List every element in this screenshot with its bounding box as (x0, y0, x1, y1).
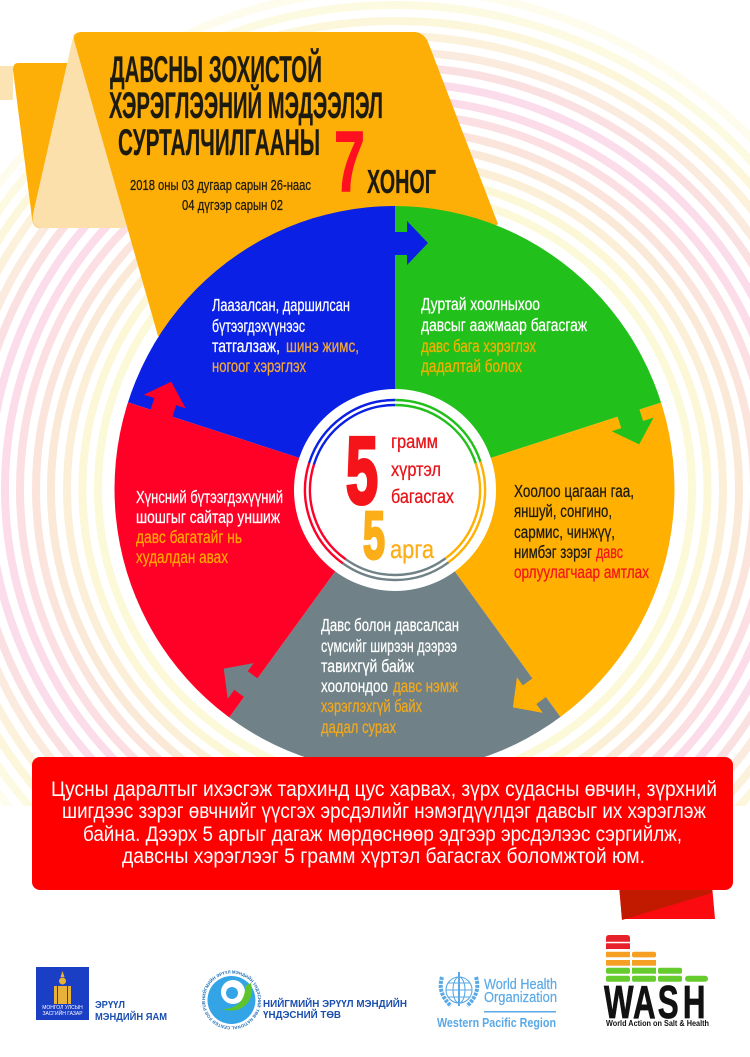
blue emblem square (36, 967, 89, 1020)
text: red wedge (136, 487, 283, 567)
WASH tagline: World Action on Salt & Health (606, 1018, 709, 1028)
text: gray wedge: сүмсийг ширээн дээрээ (321, 636, 457, 656)
method label: арга (390, 534, 434, 564)
ribbon back panel (13, 63, 70, 228)
word: week: ХОНОГ (367, 163, 436, 200)
message text: давсны хэрэглээг 5 грамм хүртэл багасгах боломжтой юм. (122, 845, 645, 868)
message text (51, 778, 717, 868)
blue disc (208, 976, 256, 1024)
arrow: gray into red (211, 651, 265, 707)
WHO globe (441, 972, 477, 1006)
text: gray wedge: хэрэглэхгүй байх (321, 696, 422, 716)
red message box (32, 757, 733, 920)
logo: National Center for Public Health: ҮНДЭСНИЙ ТӨВ (263, 1008, 341, 1021)
text: red wedge: худалдан авах (136, 547, 228, 567)
text: green wedge: давс бага хэрэглэх (421, 336, 536, 356)
text: orange wedge (514, 481, 649, 582)
logo: Ministry of Health: МЭНДИЙН ЯАМ (95, 1010, 167, 1023)
background concentric rings (0, 0, 750, 806)
text: blue wedge: шинэ жимс, (286, 336, 359, 356)
text: gray wedge: хоолондоо (321, 676, 388, 696)
title ribbon (0, 32, 498, 336)
ribbon fold under box (619, 885, 712, 920)
wheel wedges (114, 206, 674, 757)
text: orange wedge: давс (596, 542, 623, 562)
wedge: blue (128, 206, 395, 458)
message text: байна. Дээрх 5 аргыг дагаж мөрдөснөөр эдгээр эрсдэлээс сэргийлж, (83, 823, 682, 846)
text: blue wedge: Лаазалсан, даршилсан (212, 295, 350, 315)
logo: Ministry of Health (36, 967, 167, 1023)
WHO region: Western Pacific Region (437, 1016, 556, 1030)
ribbon strip (619, 885, 715, 919)
center badge: хүртэл (391, 460, 441, 481)
arrow: red into blue (139, 375, 192, 422)
text: gray wedge: тавихгүй байж (321, 656, 414, 676)
logo: Ministry of Health: ЗАСГИЙН ГАЗАР (42, 1009, 83, 1017)
wedge: gray (229, 571, 560, 757)
circular caption (205, 974, 258, 1026)
text: orange wedge: Хоолоо цагаан гаа, (514, 481, 634, 501)
wedge: orange (454, 402, 674, 717)
text: orange wedge: орлуулагчаар амтлах (514, 562, 649, 582)
date range: 2018 оны 03 дугаар сарын 26-наас (130, 177, 311, 194)
text: blue wedge: бүтээгдэхүүнээс (212, 316, 305, 336)
level bars (606, 935, 708, 982)
wedge: green (395, 206, 661, 458)
text: red wedge: Хүнсний бүтээгдэхүүний (136, 487, 283, 507)
wedge: red (114, 402, 336, 718)
text: red wedge: давс багатайг нь (136, 527, 242, 547)
text: gray wedge: Давс болон давсалсан (321, 615, 459, 635)
title text: ХЭРЭГЛЭЭНИЙ МЭДЭЭЛЭЛ (109, 84, 383, 126)
white swirl (221, 980, 245, 1004)
white disc (294, 389, 496, 591)
logo: National Center for Public Health (202, 970, 407, 1030)
ribbon tail left edge (0, 66, 13, 100)
logo: National Center for Public Health: НИЙГМИЙН ЭРҮҮЛ МЭНДИЙН ҮНДЭСНИЙ ТӨВ NATIONAL CENTER FOR PUBLIC HEALTH (202, 970, 262, 1030)
center badge: багасгах (391, 487, 454, 508)
ministry name: ЭРҮҮЛ (95, 1000, 125, 1011)
ribbon main panel (74, 32, 498, 336)
WHO name: World Health (484, 976, 557, 993)
box body (32, 757, 733, 890)
text: orange wedge: нимбэг зэрэг (514, 542, 592, 562)
ribbon fold (33, 33, 126, 228)
text: gray wedge: дадал сурах (321, 717, 396, 737)
soyombo emblem (54, 971, 71, 1004)
text: blue wedge: татгалзаж, (212, 336, 280, 356)
logo: WASH (604, 935, 709, 1029)
green crescent (222, 983, 252, 1011)
text: orange wedge: сармис, чинжүү, (514, 522, 615, 542)
text: green wedge: Дуртай хоолныхоо (421, 294, 540, 314)
text: red wedge: шошгыг сайтар уншиж (136, 507, 280, 527)
title text (109, 48, 436, 210)
text: gray wedge (321, 615, 459, 737)
big red 5: 5 (346, 418, 378, 524)
arrow: green into orange (607, 404, 660, 451)
text: orange wedge: яншуй, сонгино, (514, 501, 612, 521)
big number 7: 7 (334, 114, 365, 210)
center badge (269, 364, 521, 616)
date range: 04 дүгээр сарын 02 (182, 197, 283, 214)
center name: НИЙГМИЙН ЭРҮҮЛ МЭНДИЙН (263, 997, 407, 1010)
date range (130, 177, 311, 214)
title text: СУРТАЛЧИЛГААНЫ (118, 122, 320, 163)
gold 5: 5 (363, 498, 385, 574)
WASH wordmark: WASH (604, 977, 705, 1029)
text: gray wedge: давс нэмж (393, 676, 458, 696)
text: green wedge: давсыг аажмаар багасгаж (421, 315, 587, 335)
title text: ДАВСНЫ ЗОХИСТОЙ (110, 48, 322, 90)
text: green wedge: дадалтай болох (421, 356, 522, 376)
double ring in wedge colours (269, 364, 521, 616)
arrow: blue into green (393, 221, 428, 265)
pie wheel of five methods (114, 206, 674, 757)
logo: World Health Organization (437, 972, 557, 1030)
logo: World Health Organization: Organization (484, 989, 557, 1006)
emblem caption: МОНГОЛ УЛСЫН (42, 1005, 83, 1011)
arrow: orange into gray (500, 669, 554, 725)
inner blue dot (226, 987, 238, 999)
gram label: грамм (391, 432, 438, 453)
text: green wedge (421, 294, 587, 376)
text: blue wedge (212, 295, 359, 376)
text: blue wedge: ногоог хэрэглэх (212, 356, 306, 376)
